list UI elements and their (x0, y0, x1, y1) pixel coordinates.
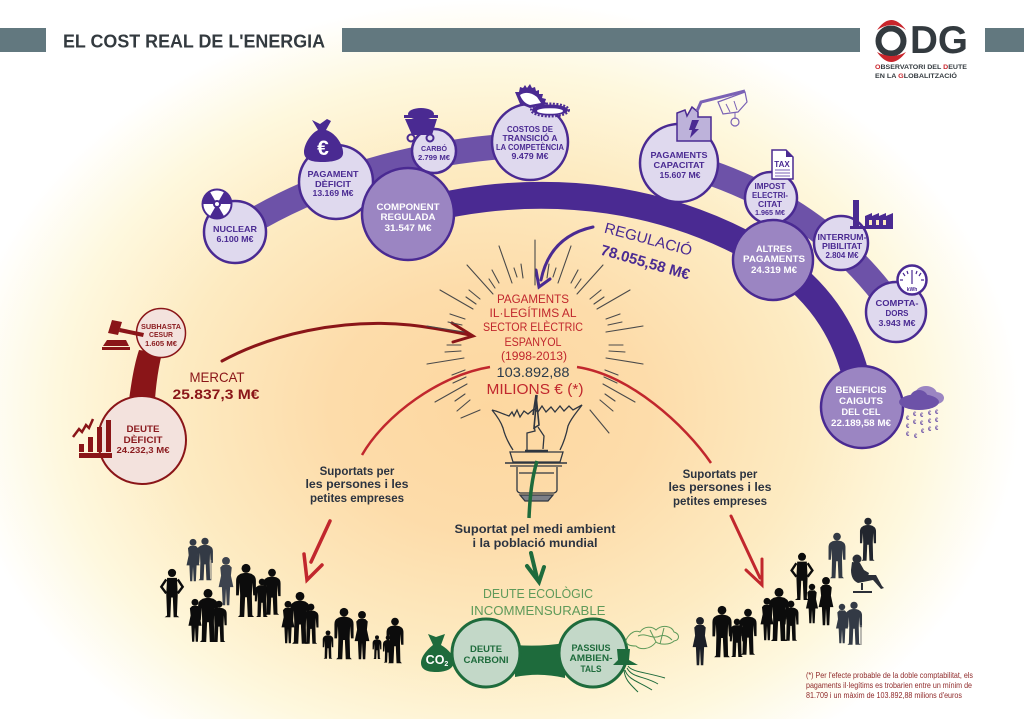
circle: costos de transicio (492, 104, 568, 180)
circle: subhasta cesur: 1.605 M€ (145, 339, 178, 348)
icon: cloud with euro rain: € (906, 416, 910, 422)
circle: pagament deficit: DÈFICIT (315, 179, 352, 189)
icon: cooling tower with smoke and roots (613, 626, 678, 692)
text: supported left: petites empreses (310, 493, 404, 505)
central text: illegitimate payments (483, 294, 584, 398)
icon: radioactive (202, 188, 232, 220)
circle: pagaments capacitat: CAPACITAT (654, 160, 705, 170)
circle: nuclear: 6.100 M€ (216, 234, 254, 244)
circle: deute deficit: DEUTE (126, 424, 160, 434)
circle: carbo (412, 129, 456, 173)
circle: pagaments capacitat (640, 124, 718, 202)
central text: illegitimate payments: MILIONS € (*) (486, 381, 584, 398)
mercat label: MERCAT (190, 369, 245, 385)
icon: gears (515, 84, 569, 116)
circle: costos de transicio: COSTOS DE (507, 124, 553, 134)
title: EL COST REAL DE L'ENERGIA (63, 32, 325, 52)
text: supported right (668, 469, 772, 508)
circle: costos de transicio: LA COMPETÈNCIA (496, 142, 564, 152)
circle: passius ambientals: AMBIEN- (570, 653, 612, 663)
circle: component regulada: 31.547 M€ (384, 223, 432, 234)
footnote: 81.709 i un màxim de 103.892,88 milions d'euros (806, 691, 962, 700)
logo ODG: DG (910, 19, 968, 62)
icon: cloud with euro rain: € (928, 411, 932, 417)
circle: interrumpibilitat: 2.804 M€ (826, 250, 859, 260)
heading: ecological debt (470, 586, 606, 618)
circle: deute deficit: 24.232,3 M€ (116, 445, 170, 455)
light rays (427, 240, 643, 433)
circle: beneficis caiguts del cel: DEL CEL (842, 407, 881, 418)
circle: pagament deficit: 13.169 M€ (312, 188, 354, 198)
arrow: left red arc (362, 367, 490, 455)
icon: cloud with euro rain: € (935, 426, 939, 432)
central text: illegitimate payments: (1998-2013) (501, 351, 567, 363)
circle: comptadors: 3.943 M€ (878, 318, 916, 328)
circle: subhasta cesur: SUBHASTA (141, 322, 182, 331)
circle: impost electricitat: CITAT (758, 200, 782, 209)
text: supported right: Suportats per (683, 469, 758, 481)
header bars (0, 28, 1024, 52)
circle: impost electricitat: ELECTRI- (752, 191, 788, 200)
arrow: green to ecological debt (527, 553, 544, 582)
circle: passius ambientals: TALS (580, 664, 602, 674)
circle: nuclear: NUCLEAR (213, 224, 257, 234)
regulacio label: REGULACIÓ (602, 220, 694, 260)
circle: beneficis caiguts del cel: BENEFICIS (836, 385, 886, 396)
arrow: right red arc (577, 367, 711, 463)
band: dark purple regulation arc (408, 195, 862, 407)
circle: impost electricitat: IMPOST (754, 182, 786, 191)
circle: altres pagaments: 24.319 M€ (751, 265, 798, 276)
circle: nuclear (204, 201, 266, 263)
circle: pagament deficit: PAGAMENT (308, 169, 359, 179)
mercat label (172, 369, 260, 402)
circle: pagaments capacitat: PAGAMENTS (650, 150, 708, 160)
icon: cloud with euro rain: € (906, 432, 910, 438)
logo ODG: OBSERVATORI DEL DEUTE (875, 64, 968, 71)
band: light purple right (679, 163, 896, 312)
band: mercat (129, 350, 162, 400)
central text: illegitimate payments: 103.892,88 (496, 364, 570, 380)
circle: carbo: 2.799 M€ (418, 155, 450, 162)
central text: illegitimate payments: PAGAMENTS (497, 294, 569, 306)
circle: costos de transicio: TRANSICIÓ A (502, 132, 558, 143)
icon: euro bag (304, 119, 343, 162)
circle: deute deficit: DÈFICIT (124, 435, 163, 445)
text: supported environment: i la població mundial (472, 538, 598, 550)
icon: cloud with euro rain: € (928, 419, 932, 425)
circle: altres pagaments: ALTRES (756, 244, 792, 255)
icon: CO2 bag (421, 634, 454, 672)
arrow: green filament line (529, 461, 537, 518)
circle: altres pagaments (733, 220, 813, 300)
icon: cloud with euro rain: € (920, 413, 924, 419)
icon: meter gauge: kWh (907, 287, 917, 293)
text: supported left: Suportats per (320, 466, 395, 478)
circle: comptadors (866, 282, 926, 342)
band: ecological (515, 643, 565, 678)
icon: cloud with euro rain: € (935, 418, 939, 424)
text: supported environment: Suportat pel medi ambient (454, 524, 616, 536)
circle: impost electricitat (745, 172, 797, 224)
arrow: regulacio (536, 227, 593, 287)
central text: illegitimate payments: SECTOR ELÈCTRIC (483, 321, 583, 334)
icon: cloud with euro rain: € (913, 420, 917, 426)
circle: pagaments capacitat: 15.607 M€ (660, 170, 701, 180)
icon: cloud with euro rain: € (906, 424, 910, 430)
circle: interrumpibilitat: INTERRUM- (818, 232, 867, 242)
icon: euro bag: € (317, 137, 329, 160)
circle: deute deficit (98, 396, 186, 484)
text: supported environment (454, 524, 616, 550)
icon: CO2 bag: 2 (444, 661, 448, 668)
circle: deute carboni: CARBONI (464, 655, 508, 665)
icon: cloud with euro rain (899, 386, 944, 440)
logo ODG: EN LA GLOBALITZACIÓ (875, 71, 957, 80)
circle: altres pagaments: PAGAMENTS (743, 254, 805, 265)
circle: passius ambientals (559, 619, 627, 687)
circle: beneficis caiguts del cel: 22.189,58 M€ (831, 418, 892, 429)
icon: cloud with euro rain: € (921, 429, 925, 435)
people: right crowd (693, 518, 884, 665)
band: light purple left (235, 145, 530, 232)
footnote (806, 671, 973, 700)
text: supported right: les persones i les (668, 482, 772, 494)
circle: component regulada (362, 168, 454, 260)
light bulb (492, 395, 582, 501)
central text: illegitimate payments: ESPANYOL (504, 337, 562, 349)
arrow: down to left people (304, 521, 330, 580)
icon: tax document: TAX (774, 160, 790, 169)
logo ODG (875, 19, 968, 80)
central text: illegitimate payments: IL·LEGÍTIMS AL (490, 307, 577, 320)
arrow: down to right people (731, 516, 762, 585)
text: supported right: petites empreses (673, 496, 767, 508)
icon: meter gauge (898, 266, 926, 294)
circle: beneficis caiguts del cel: CAIGUTS (839, 396, 883, 407)
circle: subhasta cesur: CESUR (149, 330, 174, 339)
circle: comptadors: COMPTA- (876, 298, 919, 308)
circle: impost electricitat: 1.965 M€ (755, 208, 786, 217)
circle: deute carboni (452, 619, 520, 687)
circle: subhasta cesur (136, 308, 186, 358)
circle: carbo: CARBÓ (421, 144, 448, 153)
footnote: (*) Per l'efecte probable de la doble comptabilitat, els (806, 671, 973, 680)
text: supported left: les persones i les (306, 479, 408, 491)
icon: CO2 bag: CO (426, 653, 444, 667)
icon: cloud with euro rain: € (913, 412, 917, 418)
icon: tax document (772, 150, 793, 179)
heading: ecological debt: INCOMMENSURABLE (470, 603, 606, 618)
arrow: mercat (222, 323, 473, 361)
circle: component regulada: REGULADA (380, 212, 436, 223)
icon: cloud with euro rain: € (914, 434, 918, 440)
icon: cloud with euro rain: € (928, 427, 932, 433)
heading: ecological debt: DEUTE ECOLÒGIC (483, 586, 593, 601)
icon: cloud with euro rain: € (935, 410, 939, 416)
circle: comptadors: DORS (886, 308, 909, 318)
regulacio label: 78.055,58 M€ (599, 242, 692, 284)
circle: interrumpibilitat (814, 216, 868, 270)
circle: passius ambientals: PASSIUS (572, 643, 610, 653)
icon: gavel (102, 320, 144, 350)
icon: cloud with euro rain: € (920, 421, 924, 427)
icon: power plant (677, 91, 747, 141)
circle: pagament deficit (299, 145, 373, 219)
circle: deute carboni: DEUTE (470, 644, 502, 654)
circle: costos de transicio: 9.479 M€ (512, 151, 549, 161)
footnote: pagaments il·legítims es trobarien entre un mínim de (806, 681, 972, 690)
icon: rising chart (73, 419, 112, 458)
circle: component regulada: COMPONENT (376, 202, 440, 213)
circle: beneficis caiguts del cel (821, 366, 903, 448)
circle: interrumpibilitat: PIBILITAT (822, 241, 863, 251)
text: supported left (306, 466, 408, 505)
regulacio label (599, 220, 694, 284)
icon: coal cart (404, 108, 438, 142)
people: left crowd (161, 538, 403, 663)
icon: factory (850, 200, 893, 229)
mercat label: 25.837,3 M€ (172, 386, 260, 402)
